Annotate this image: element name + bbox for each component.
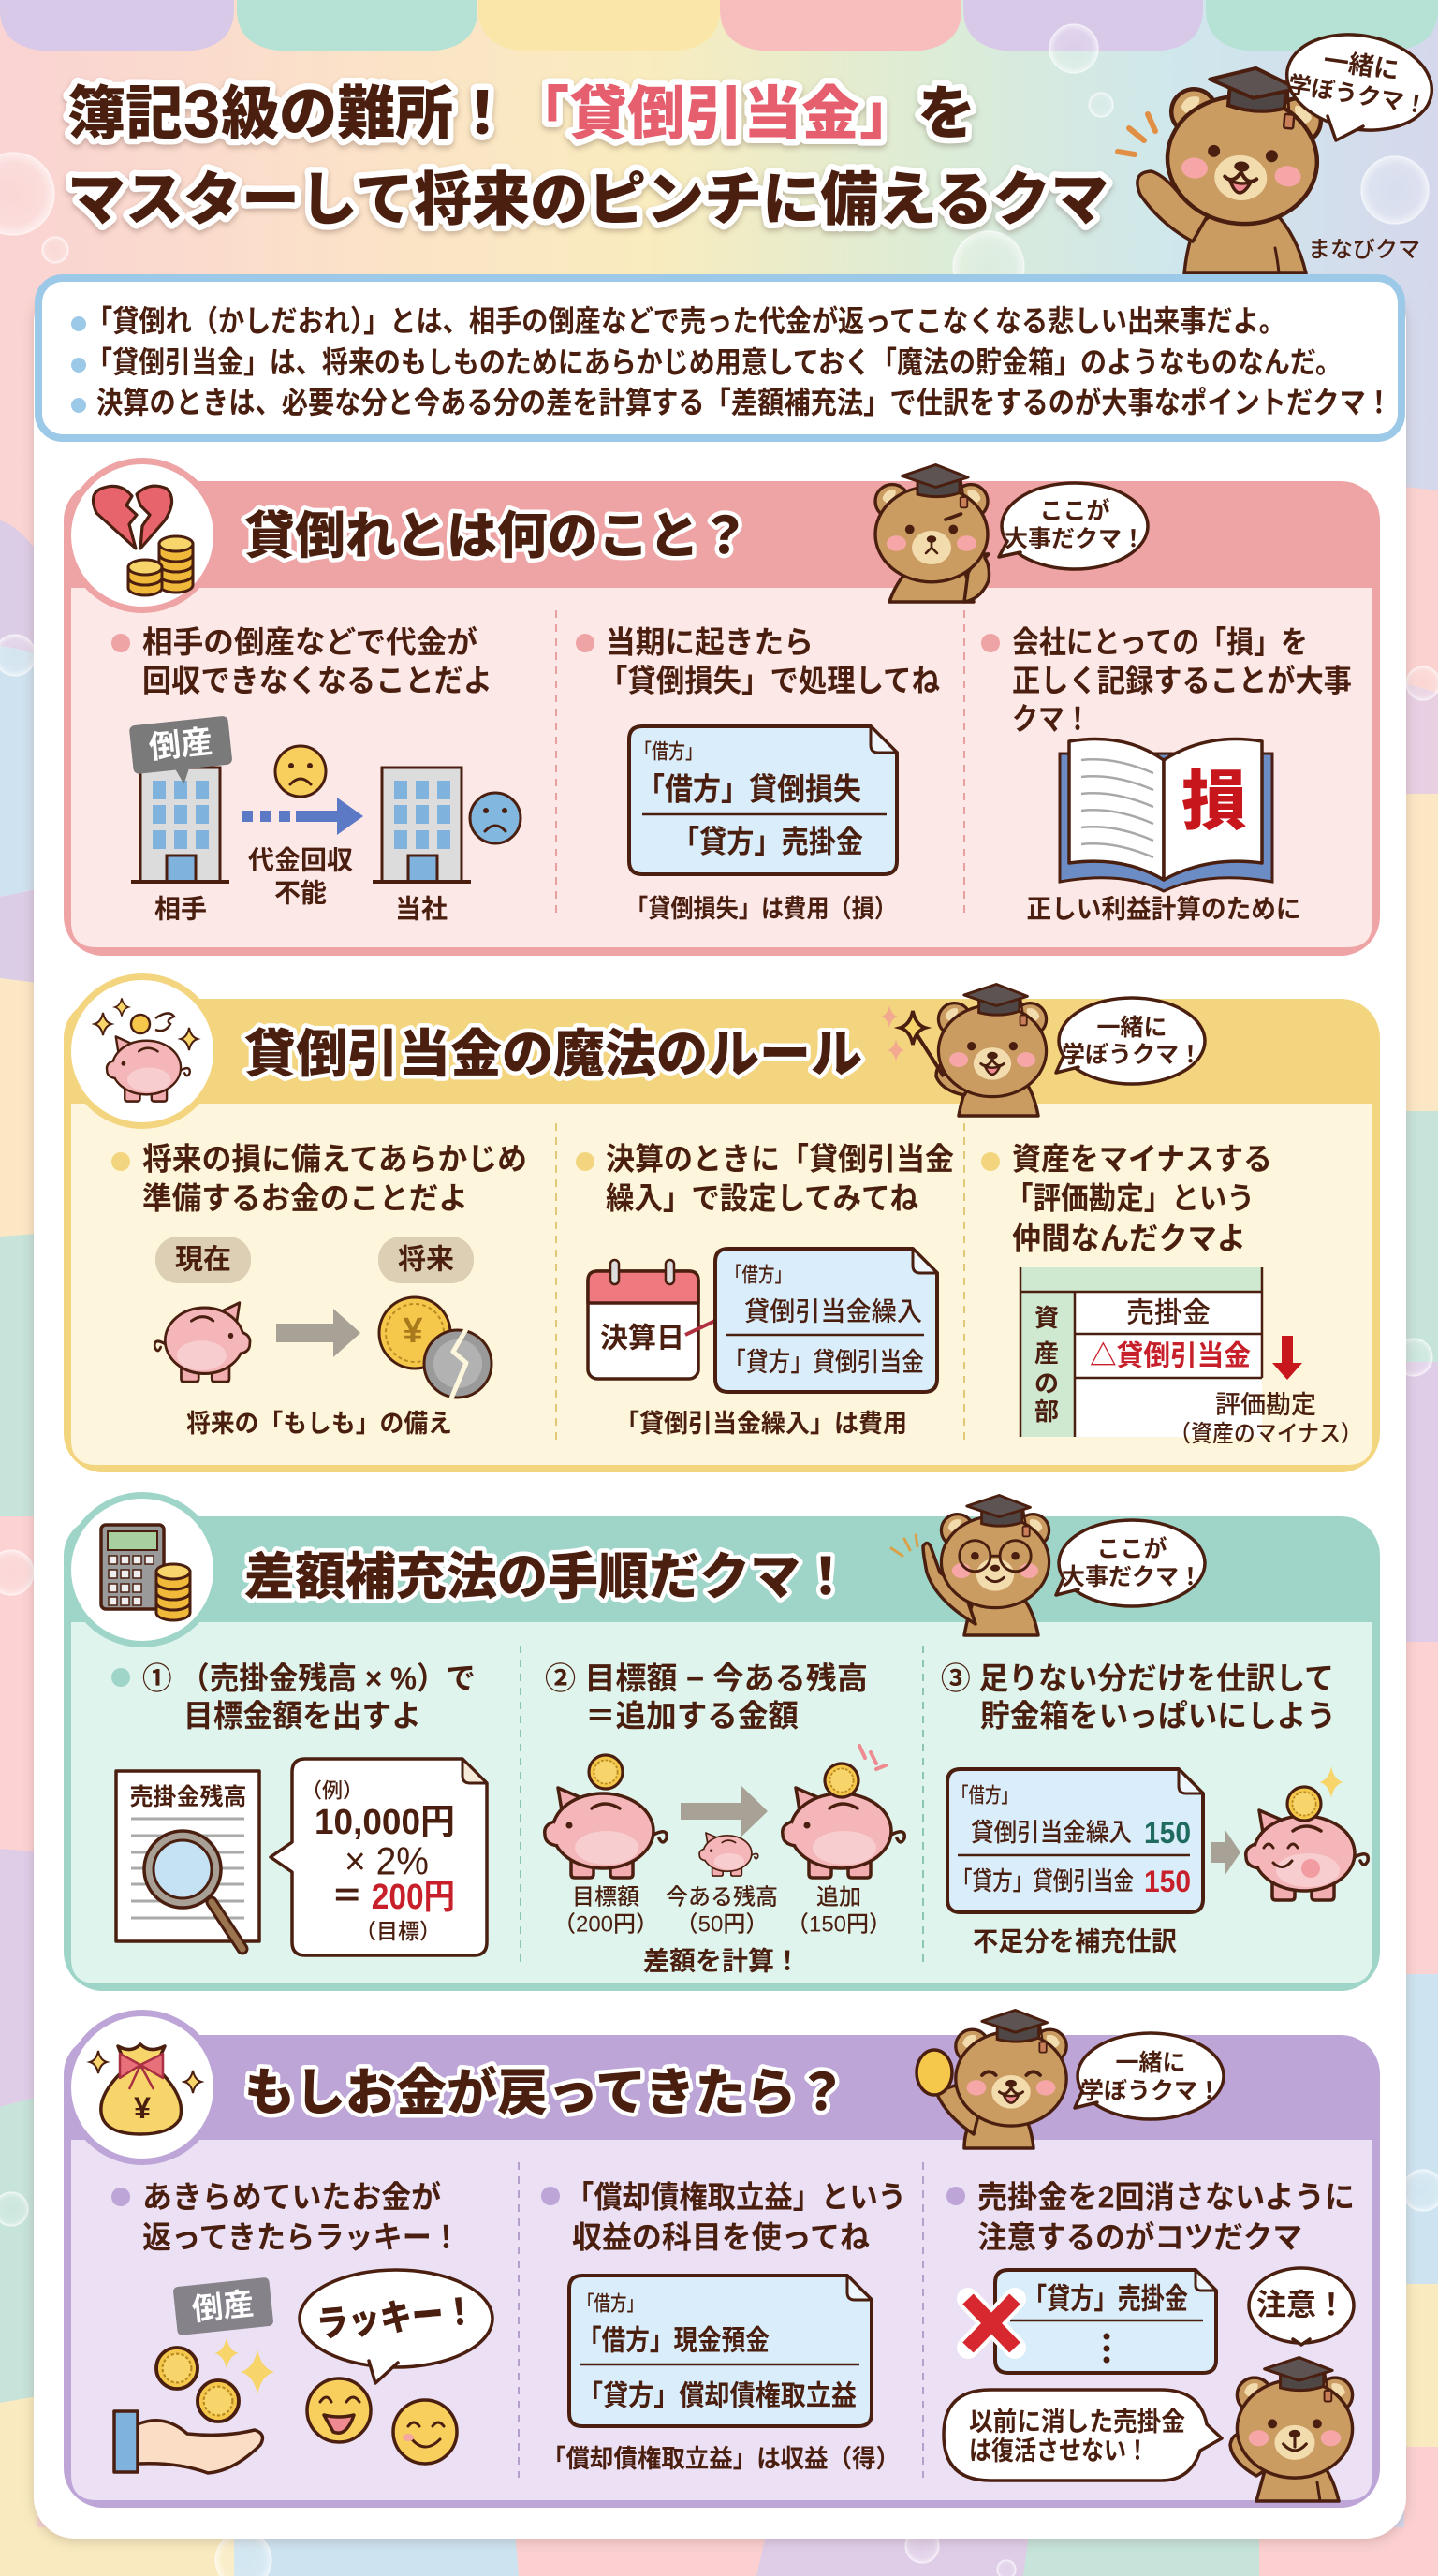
calendar: 決算日 (588, 1260, 698, 1379)
col 1 text (111, 1142, 527, 1215)
speech bubble: ラッキー: ラッキー！ (315, 2291, 477, 2346)
balance sheet: 資 (1034, 1304, 1059, 1332)
pig labels: 目標額 (572, 1885, 639, 1910)
illustration: bankrupt building to own company: 当社 (395, 895, 448, 923)
col 2 text (576, 625, 940, 698)
journal note: 150: 150 (1144, 1816, 1191, 1850)
intro panel (38, 278, 1401, 438)
speech bubble: warning (944, 2390, 1222, 2481)
smiling coin 2 (393, 2400, 457, 2464)
speech bubble: warning: 以前に消した売掛金 (969, 2408, 1185, 2436)
piggy: target (545, 1755, 667, 1878)
speech bubble (999, 483, 1148, 569)
step 2 text (545, 1661, 868, 1734)
icon: open book: 損 (1181, 765, 1247, 838)
tag: 倒産: 倒産 (190, 2286, 256, 2327)
icon: money bag: ¥ (134, 2091, 151, 2125)
caption: 将来の「もしも」の備え (186, 1410, 452, 1438)
header bear mascot (1118, 61, 1325, 273)
pill: 現在: 現在 (175, 1245, 231, 1275)
col 3 text: クマ！ (1012, 702, 1091, 736)
bear: glasses (891, 1495, 1049, 1635)
panel 4: お金が戻ったら (64, 2010, 1380, 2508)
speech bubble: header: 一緒に (1322, 47, 1401, 84)
callout: example calculation: ＝ 200円 (331, 1878, 455, 1917)
step 3 text: 貯金箱をいっぱいにしよう (980, 1698, 1336, 1734)
speech bubble: 一緒に (1115, 2050, 1186, 2076)
icon: open book (1060, 739, 1272, 891)
illustration: bankrupt building to own company (129, 715, 521, 923)
col 3 text: 資産をマイナスする (1012, 1142, 1272, 1176)
balance sheet: 部 (1034, 1398, 1059, 1426)
panel 3: 差額補充法 (64, 1495, 1380, 1991)
col 3 text: 「評価勘定」という (1005, 1181, 1255, 1215)
calendar: 決算日: 決算日 (600, 1324, 684, 1354)
balance sheet: （資産のマイナス） (1169, 1421, 1362, 1447)
journal note: 償却債権取立益: 「借方」現金預金 (578, 2325, 770, 2357)
journal note: 150: 150 (1144, 1865, 1191, 1898)
icon: calculator and coins (67, 1496, 217, 1644)
heading: もしお金が戻ってきたら？ (244, 2064, 847, 2121)
col 1 text (111, 625, 492, 698)
speech bubble: ここが (1096, 1535, 1167, 1562)
balance sheet: の (1034, 1369, 1059, 1398)
illustration: bankrupt building to own company: 代金回収 (248, 846, 353, 874)
piggy: additional (783, 1746, 904, 1878)
journal note: 償却債権取立益: 「貸方」償却債権取立益 (578, 2381, 857, 2411)
caption: 「償却債権取立益」は収益（得） (542, 2445, 900, 2473)
caption: 不足分を補充仕訳 (973, 1926, 1177, 1956)
speech bubble: ラッキー (300, 2270, 492, 2383)
col 3 text (981, 625, 1352, 736)
col 1 text: 将来の損に備えてあらかじめ (142, 1142, 527, 1176)
journal note: 繰入: 「借方」 (726, 1264, 791, 1286)
col 1 text: 相手の倒産などで代金が (142, 625, 477, 659)
step 3 text: ③ 足りない分だけを仕訳して (941, 1661, 1334, 1696)
icon: money bag (67, 2012, 217, 2162)
tag: 倒産 (173, 2277, 273, 2335)
icon: red cross (968, 2299, 1015, 2348)
col 3 text: 売掛金を2回消さないように (977, 2179, 1355, 2215)
balance sheet: 評価勘定 (1215, 1391, 1316, 1419)
caption: 差額を計算！ (643, 1947, 800, 1975)
mascot name: まなびクマ (1308, 238, 1420, 262)
piggy: full and happy (1246, 1766, 1368, 1900)
bear: coin (917, 2010, 1066, 2148)
main title (67, 77, 1108, 232)
speech bubble: 注意: 注意！ (1256, 2288, 1346, 2321)
title line 1: 簿記3級の難所！「貸倒引当金」を (67, 77, 976, 152)
caption: 正しい利益計算のために (1026, 895, 1301, 923)
sad face (275, 746, 326, 797)
connector (685, 1311, 735, 1335)
balance sheet: △貸倒引当金 (1090, 1340, 1251, 1372)
col 1 text: 回収できなくなることだよ (142, 663, 492, 698)
illustration: bankrupt building to own company: 相手 (154, 895, 207, 923)
coin and broken coin (379, 1297, 492, 1398)
step 1 text: 目標金額を出すよ (183, 1698, 421, 1734)
balance sheet (1020, 1267, 1362, 1447)
piggy: current (699, 1833, 758, 1876)
journal note: 貸倒損失: 「借方」 (635, 739, 702, 764)
icon: broken heart and coins (67, 461, 217, 610)
panel 1: 貸倒れとは (64, 461, 1380, 956)
bear: serious (875, 464, 989, 602)
caption: 「貸倒損失」は費用（損） (625, 895, 897, 923)
heading: 差額補充法の手順だクマ！ (244, 1549, 851, 1605)
journal note: 繰入: 「貸方」貸倒引当金 (724, 1348, 924, 1376)
journal note: 貸倒損失: 「貸方」売掛金 (672, 824, 863, 859)
arrow (276, 1309, 360, 1357)
balance sheet: 産 (1034, 1339, 1059, 1368)
pill: 現在 (155, 1237, 251, 1283)
coins and hand (114, 2337, 274, 2473)
speech bubble: header (1280, 23, 1438, 141)
arrow: payment blocked (242, 798, 363, 835)
journal note: 150: 「借方」 (952, 1784, 1018, 1807)
tag: 倒産 (129, 715, 234, 789)
step 1 text: ① （売掛金残高 × %）で (142, 1661, 476, 1696)
paper with magnifier: 売掛金残高 (129, 1783, 247, 1810)
speech bubble: 注意 (1249, 2268, 1354, 2345)
arrow: minus (1272, 1336, 1302, 1380)
heading: 貸倒れとは何のこと？ (244, 508, 750, 564)
pill: 将来: 将来 (398, 1245, 454, 1275)
speech bubble (1075, 2033, 1224, 2119)
col 2 text (576, 1142, 954, 1215)
col 2 text: 「貸倒損失」で処理してね (599, 663, 940, 698)
pig labels: （200円） (553, 1911, 658, 1938)
speech bubble: warning: は復活させない！ (969, 2436, 1149, 2466)
pig labels: 今ある残高 (666, 1885, 778, 1910)
arrow (1211, 1829, 1240, 1876)
speech bubble (1056, 1520, 1205, 1606)
col 3 text: 会社にとっての「損」を (1012, 625, 1308, 659)
journal note: 貸倒損失: 「借方」貸倒損失 (637, 771, 861, 807)
arrow (681, 1786, 768, 1837)
illustration: bankrupt building to own company: 不能 (274, 878, 327, 908)
step 2 text: ② 目標額 − 今ある残高 (545, 1661, 868, 1696)
caption: 「貸倒引当金繰入」は費用 (615, 1410, 907, 1438)
col 3 text (981, 1142, 1272, 1256)
col 3 text: 正しく記録することが大事 (1012, 663, 1352, 698)
journal note: 償却債権取立益: 「借方」 (578, 2291, 643, 2316)
coin and broken coin: ¥ (403, 1311, 423, 1351)
bear: magic wand (881, 984, 1047, 1116)
journal note: 150 (947, 1769, 1203, 1912)
speech bubble: 学ぼうクマ！ (1062, 1042, 1202, 1068)
speech bubble: 学ぼうクマ！ (1080, 2078, 1221, 2104)
col 1 text: 返ってきたらラッキー！ (142, 2220, 461, 2254)
journal note: 貸倒損失 (629, 726, 897, 874)
intro line 1: 「貸倒れ（かしだおれ）」とは、相手の倒産などで売った代金が返ってこなくなる悲しい出来事だよ。 (86, 304, 1285, 338)
step 1 text (111, 1661, 476, 1734)
journal note: 償却債権取立益 (569, 2276, 872, 2426)
journal note: 繰入 (715, 1249, 937, 1392)
speech bubble: 大事だクマ！ (1005, 526, 1145, 552)
pig labels: 追加 (816, 1885, 861, 1910)
col 2 text: 当期に起きたら (606, 625, 814, 659)
pig labels: （50円） (676, 1911, 768, 1938)
col 2 text (541, 2179, 906, 2254)
panel 2: 魔法のルール (64, 977, 1380, 1472)
callout: example calculation: （目標） (355, 1919, 441, 1943)
col 3 text (946, 2179, 1355, 2254)
tag: 倒産: 倒産 (147, 724, 214, 766)
pig labels (553, 1885, 891, 1938)
col 1 text: 準備するお金のことだよ (142, 1181, 468, 1215)
speech bubble: 大事だクマ！ (1062, 1564, 1202, 1590)
pig labels: （150円） (786, 1911, 891, 1938)
step 2 text: ＝追加する金額 (585, 1698, 799, 1734)
col 2 text: 繰入」で設定してみてね (606, 1181, 918, 1215)
icon: piggy with coin (67, 977, 217, 1125)
bear: pointing (1230, 2358, 1353, 2501)
pill: 将来 (378, 1237, 474, 1283)
title line 2: マスターして将来のピンチに備えるクマ (67, 168, 1108, 232)
journal note: 繰入: 貸倒引当金繰入 (744, 1297, 922, 1325)
journal note with cross: 「貸方」売掛金 (1023, 2282, 1188, 2316)
col 2 text: 決算のときに「貸倒引当金 (606, 1142, 954, 1176)
col 2 text: 「償却債権取立益」という (565, 2179, 906, 2215)
callout: example calculation: （例） (301, 1778, 363, 1803)
col 2 text: 収益の科目を使ってね (572, 2220, 870, 2254)
col 3 text: 注意するのがコツだクマ (977, 2220, 1302, 2254)
col 3 text: 仲間なんだクマよ (1012, 1221, 1246, 1256)
journal note: 150: 貸倒引当金繰入 (971, 1819, 1132, 1847)
speech bubble: ここが (1039, 497, 1110, 524)
blue face (470, 793, 521, 843)
journal note with cross (968, 2270, 1216, 2373)
paper with magnifier (116, 1771, 259, 1949)
piggy bank (154, 1303, 250, 1382)
callout: example calculation: × 2% (345, 1838, 429, 1883)
journal note: 150: 「貸方」貸倒引当金 (952, 1867, 1134, 1895)
smiling coin 1 (307, 2378, 371, 2442)
heading: 貸倒引当金の魔法のルール (244, 1025, 862, 1083)
speech bubble: header: 学ぼうクマ！ (1286, 71, 1429, 120)
speech bubble: 一緒に (1096, 1015, 1167, 1041)
callout: example calculation: 10,000円 (315, 1803, 455, 1842)
col 1 text: あきらめていたお金が (142, 2179, 441, 2215)
col 1 text (111, 2179, 461, 2254)
step 3 text (941, 1661, 1336, 1734)
balance sheet: 売掛金 (1126, 1297, 1211, 1329)
speech bubble (1056, 998, 1205, 1084)
callout: example calculation (271, 1759, 487, 1955)
